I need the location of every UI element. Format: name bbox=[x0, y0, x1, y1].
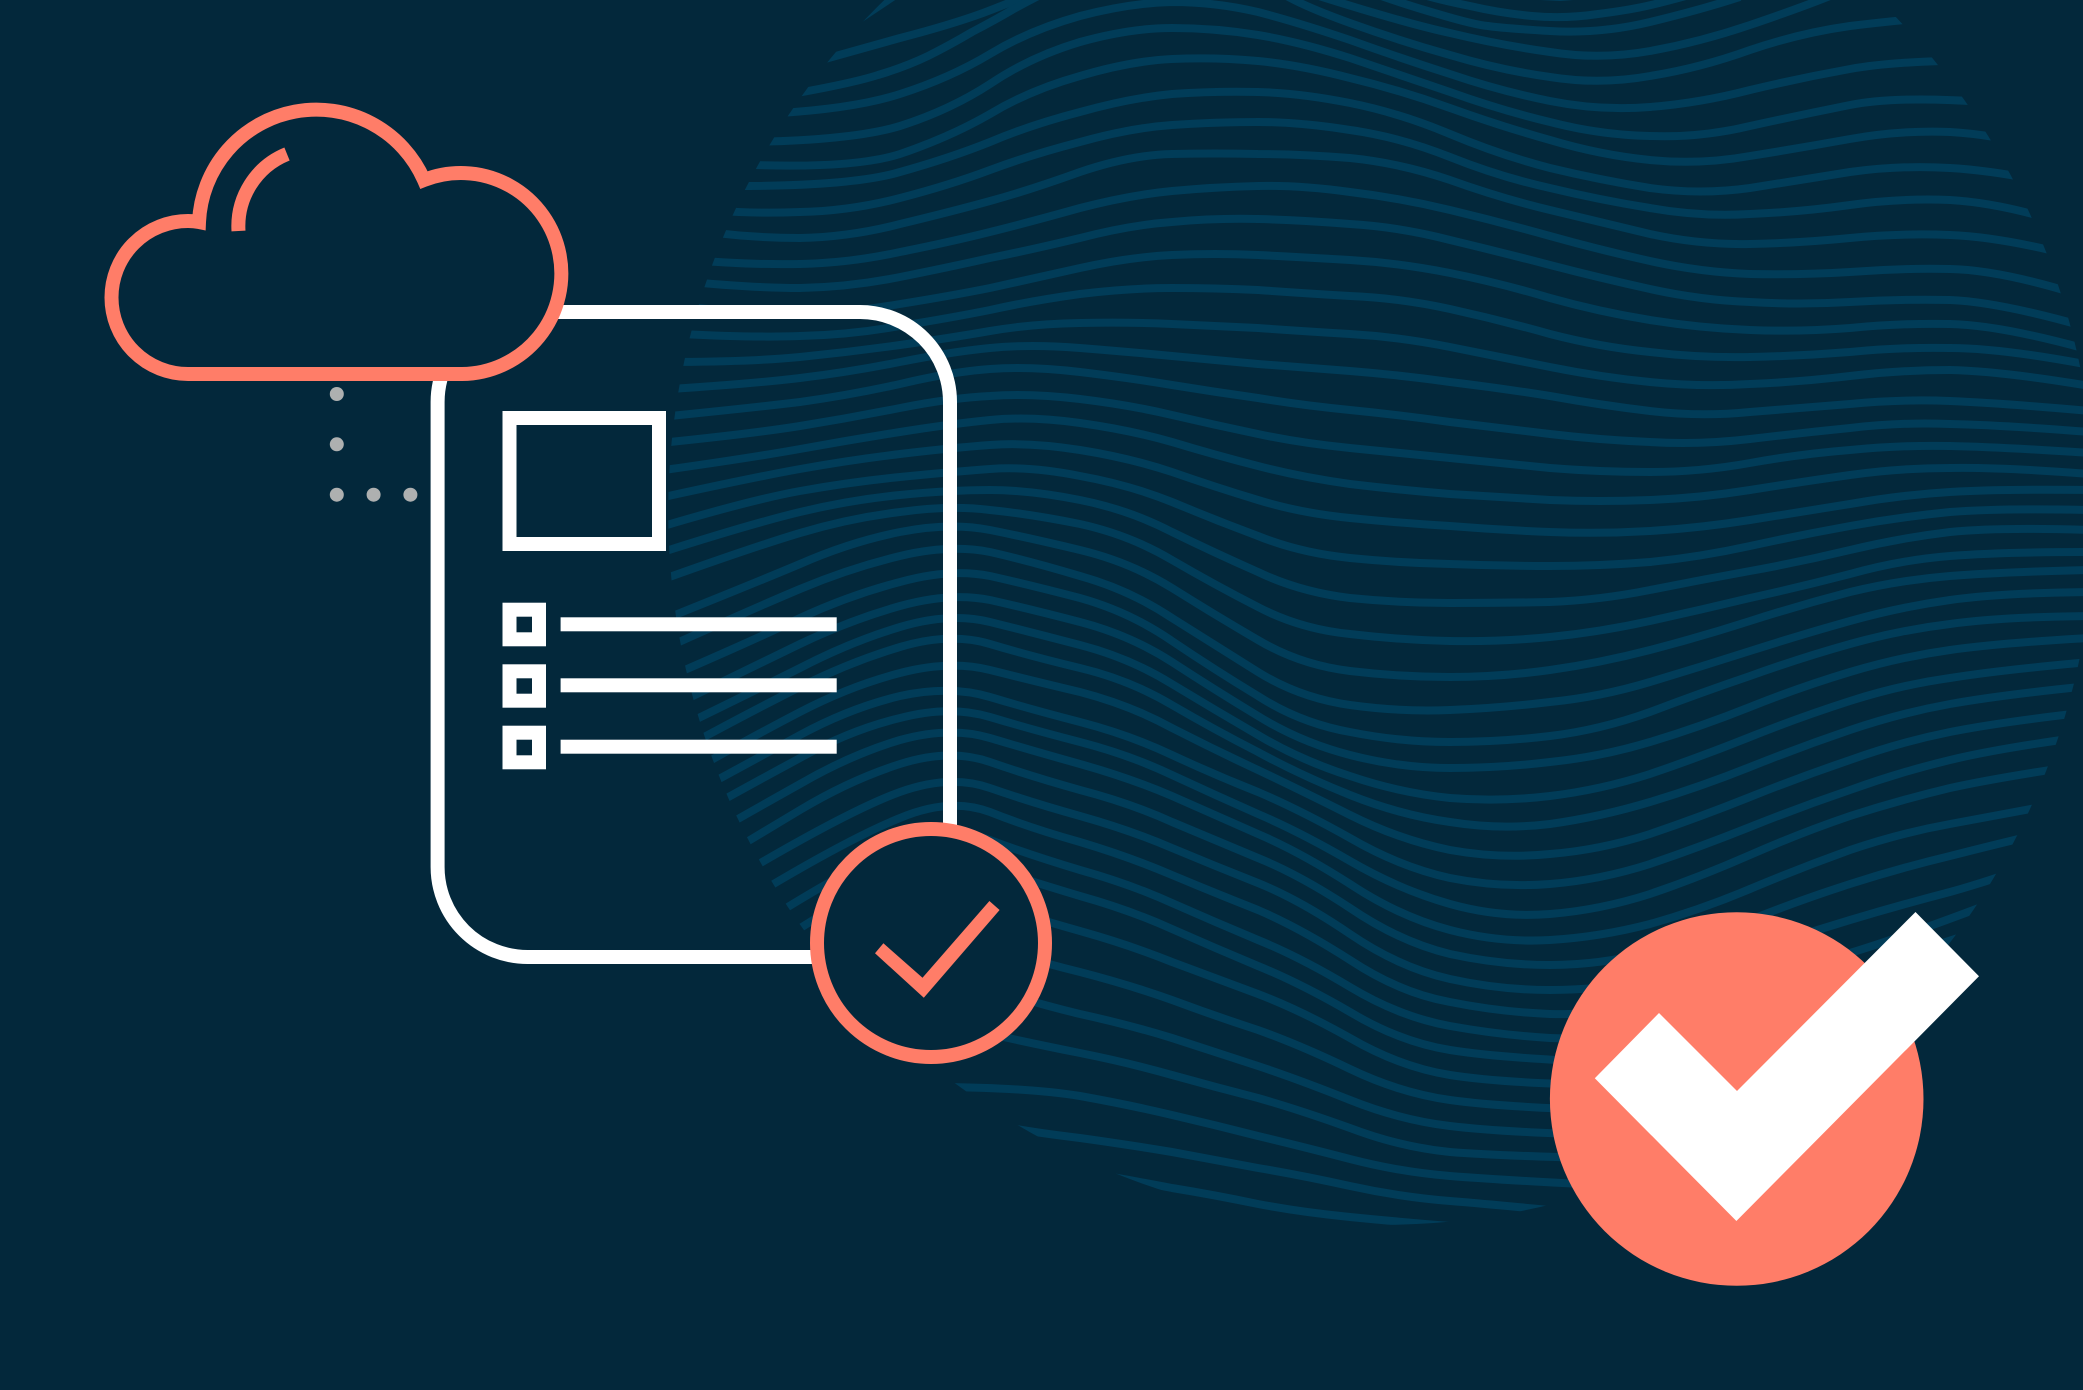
document image placeholder bbox=[510, 418, 659, 544]
icon: cloud bbox=[112, 110, 561, 374]
checklist row 3 bbox=[510, 733, 837, 762]
checklist row 1 bbox=[510, 610, 837, 639]
wave line pattern: circular contour field bbox=[650, 0, 2083, 1226]
icon: large check badge bbox=[1550, 912, 1979, 1286]
icon: small check badge bbox=[817, 829, 1045, 1057]
document card outline bbox=[438, 312, 950, 957]
dotted connector from cloud bbox=[330, 387, 417, 502]
checklist row 2 bbox=[510, 671, 837, 701]
checklist bbox=[510, 610, 837, 762]
